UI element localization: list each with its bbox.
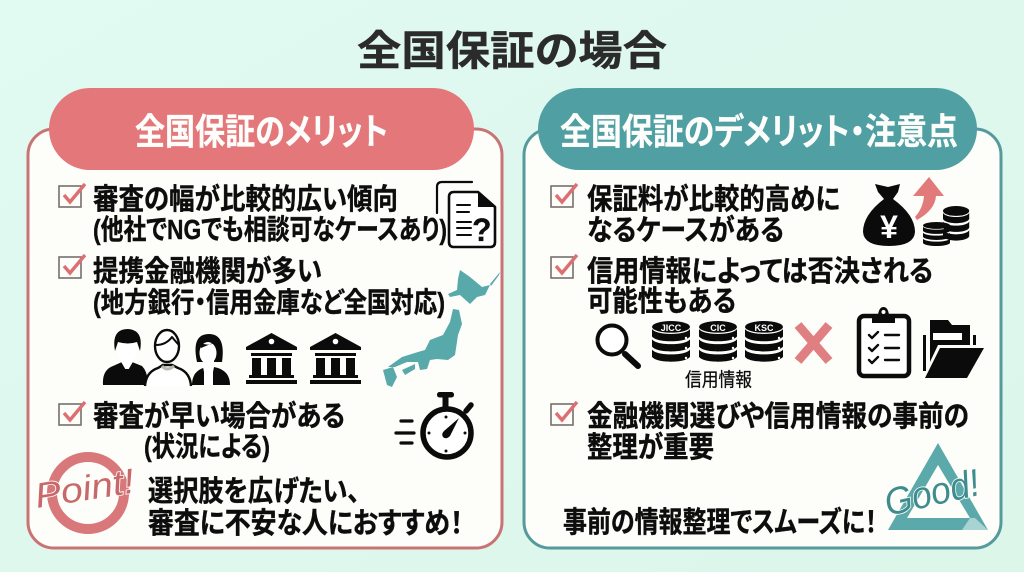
callout: demerits: 事前の情報整理でスムーズに！	[563, 505, 877, 539]
demerit 1	[551, 182, 840, 247]
merit 1: (他社でNGでも相談可なケースあり)	[93, 214, 447, 245]
panel: merits	[28, 88, 502, 548]
demerit 1: 保証料が比較的高めに	[587, 182, 840, 216]
demerit 3	[551, 400, 969, 464]
panel frame: merits	[28, 129, 502, 548]
icon: magnifier	[598, 326, 638, 366]
merit 3	[59, 399, 345, 462]
demerit 3: 金融機関選びや信用情報の事前の	[587, 400, 969, 433]
demerit 2: 信用情報によっては否決される	[587, 255, 933, 288]
icon: red cross	[798, 325, 829, 361]
demerit 3: 整理が重要	[587, 430, 714, 464]
heading: merits	[49, 88, 474, 170]
icon: people	[103, 329, 230, 386]
panel: demerits	[524, 88, 1001, 548]
badge: Point	[32, 457, 137, 529]
merit 3: 審査が早い場合がある	[93, 399, 345, 433]
icon: Japan map	[383, 270, 500, 387]
icon: credit databases JICC CIC KSC: CIC	[710, 323, 726, 333]
icon: document with question mark: ?	[472, 212, 492, 248]
icon: yen money bag with rising arrow: ¥	[880, 209, 898, 245]
icon: folder	[923, 320, 984, 378]
label: credit information: 信用情報	[685, 369, 752, 391]
demerit 2	[551, 255, 933, 318]
title: 全国保証の場合	[357, 28, 667, 74]
callout: merits: 選択肢を広げたい、	[148, 475, 360, 508]
demerit 1: なるケースがある	[587, 213, 784, 247]
heading: merits: 全国保証のメリット	[135, 111, 388, 152]
callout: merits	[148, 475, 463, 540]
heading: demerits	[538, 88, 977, 170]
merit 2: 提携金融機関が多い	[93, 254, 322, 288]
icon: stopwatch	[396, 392, 471, 457]
icon: bank 2	[310, 333, 361, 384]
icon: credit databases JICC CIC KSC: JICC	[661, 323, 682, 333]
icon: credit databases JICC CIC KSC: KSC	[754, 323, 774, 333]
icon: document with question mark	[437, 182, 495, 248]
icon: yen money bag with rising arrow	[863, 177, 969, 246]
demerit 2: 可能性もある	[587, 285, 736, 318]
icon: bank 1	[246, 333, 297, 384]
badge: Good: Good!	[881, 462, 984, 525]
merit 1	[59, 182, 447, 245]
merit 2	[59, 254, 445, 318]
merit 1: 審査の幅が比較的広い傾向	[93, 182, 398, 216]
panel frame: demerits	[524, 129, 1001, 548]
heading: demerits: 全国保証のデメリット・注意点	[560, 111, 958, 152]
icon: credit databases JICC CIC KSC	[652, 321, 783, 362]
merit 2: (地方銀行・信用金庫など全国対応)	[93, 287, 445, 318]
merit 3: (状況による)	[144, 431, 270, 462]
icon: clipboard checklist	[859, 307, 909, 376]
badge: Point: Point!	[32, 462, 137, 516]
callout: merits: 審査に不安な人におすすめ！	[148, 507, 463, 540]
